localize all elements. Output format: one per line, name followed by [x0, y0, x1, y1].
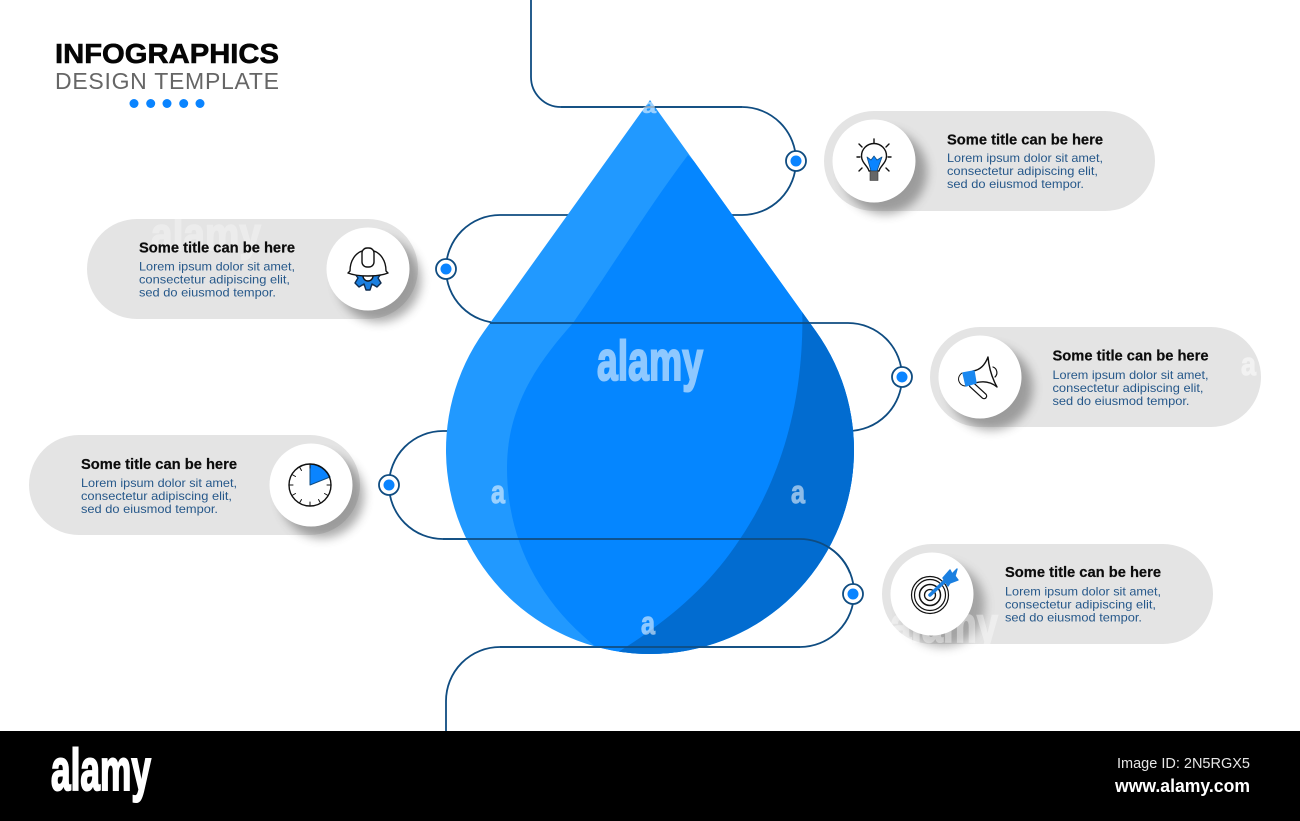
circle shadow — [949, 346, 1033, 430]
step description: consectetur adipiscing elit, — [947, 164, 1098, 178]
footer logo: alamy — [51, 738, 151, 803]
step description: Lorem ipsum dolor sit amet, — [1052, 368, 1208, 382]
subheading: DESIGN TEMPLATE — [55, 68, 279, 94]
watermark letters: a — [642, 96, 657, 118]
title block — [55, 38, 279, 108]
panel: step 5 target — [843, 544, 1213, 653]
step description — [1052, 368, 1208, 408]
watermark letters — [491, 96, 805, 641]
icon: lightbulb — [857, 139, 891, 180]
step description: consectetur adipiscing elit, — [1052, 381, 1204, 395]
step description: sed do eiusmod tempor. — [81, 502, 218, 516]
drop: dark right layer — [618, 312, 854, 654]
panel: step 3 megaphone — [892, 327, 1261, 430]
faint watermark: alamy — [890, 597, 998, 653]
step description: Lorem ipsum dolor sit amet, — [1005, 584, 1161, 598]
pill background — [29, 435, 360, 535]
watermark on drop — [491, 96, 805, 641]
pill background — [824, 111, 1155, 211]
icon circle — [832, 120, 916, 202]
icon circle — [270, 444, 352, 526]
icon circle — [890, 552, 974, 636]
icon: megaphone — [959, 357, 997, 396]
step title: Some title can be here — [139, 240, 295, 256]
circle shadow — [280, 454, 364, 538]
connector line behind the drop — [389, 0, 902, 731]
step description: consectetur adipiscing elit, — [81, 489, 232, 503]
step description — [81, 476, 237, 516]
step description: Lorem ipsum dolor sit amet, — [81, 476, 237, 490]
step description: sed do eiusmod tempor. — [947, 177, 1084, 191]
step title: Some title can be here — [1005, 565, 1161, 581]
node — [786, 151, 806, 171]
icon circle — [326, 228, 410, 310]
step title: Some title can be here — [81, 457, 237, 473]
step description — [139, 260, 295, 300]
icon: clock — [289, 464, 331, 506]
icon circle — [938, 336, 1022, 418]
panel: step 2 helmet — [87, 208, 456, 322]
pill background — [930, 327, 1261, 427]
watermark letters: a — [641, 605, 655, 641]
step title: Some title can be here — [947, 132, 1103, 148]
panel: step 4 clock — [29, 435, 399, 538]
node — [436, 259, 456, 279]
footer background — [0, 731, 1300, 821]
title dots — [130, 99, 204, 108]
step description: consectetur adipiscing elit, — [1005, 598, 1156, 612]
node — [892, 367, 912, 387]
pill background — [882, 544, 1213, 644]
image id: Image ID: 2N5RGX5 — [1117, 755, 1250, 772]
faint watermark letter: a — [1241, 346, 1256, 382]
watermark letters: a — [491, 474, 505, 510]
step description: sed do eiusmod tempor. — [1052, 394, 1190, 408]
node — [379, 475, 399, 495]
step description: Lorem ipsum dolor sit amet, — [947, 151, 1103, 165]
step description — [947, 151, 1103, 191]
step description: Lorem ipsum dolor sit amet, — [139, 260, 295, 274]
circle shadow — [337, 238, 421, 322]
step description — [1005, 584, 1161, 624]
connector line segments over the drop — [443, 107, 850, 647]
watermark word: alamy — [597, 329, 703, 392]
drop: light base layer — [446, 100, 854, 654]
step description: sed do eiusmod tempor. — [1005, 610, 1142, 624]
footer bar — [0, 731, 1300, 821]
faint watermark: alamy — [151, 208, 261, 260]
step description: sed do eiusmod tempor. — [139, 286, 276, 300]
website: www.alamy.com — [1114, 776, 1250, 796]
step description: consectetur adipiscing elit, — [139, 272, 290, 286]
water drop — [446, 100, 854, 654]
drop: middle layer — [507, 155, 880, 670]
heading: INFOGRAPHICS — [55, 38, 279, 69]
watermark letters: a — [791, 474, 805, 510]
node — [843, 584, 863, 604]
step title: Some title can be here — [1052, 348, 1208, 364]
icon: target and arrow — [912, 569, 958, 614]
panel: step 1 lightbulb — [786, 111, 1155, 214]
pill background — [87, 219, 418, 319]
icon: helmet and gear — [348, 248, 388, 290]
circle shadow — [843, 130, 927, 214]
circle shadow — [901, 563, 985, 647]
